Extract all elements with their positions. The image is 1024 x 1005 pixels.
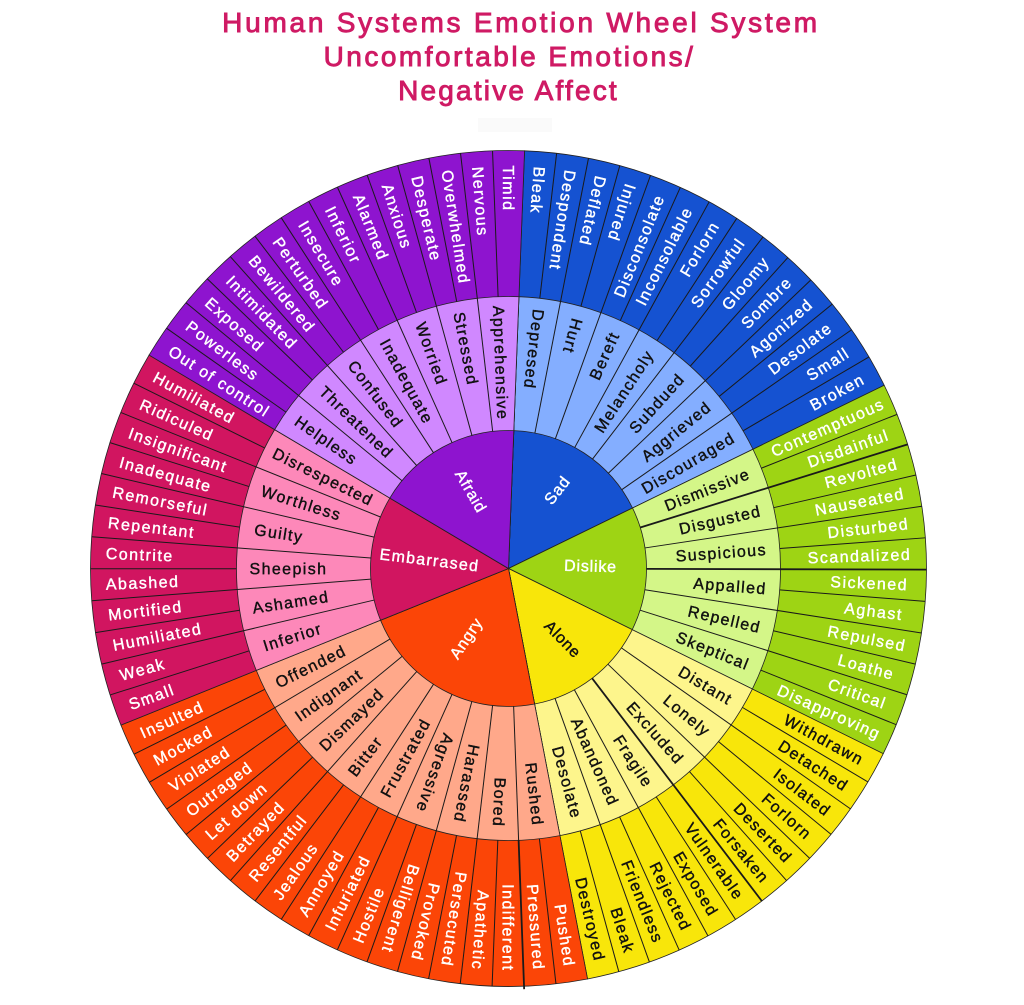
outer labels: Alone bbox=[571, 712, 866, 963]
outer labels: Embarrassed: Ridiculed bbox=[137, 397, 216, 445]
outer labels: Afraid: Intimidated bbox=[222, 273, 300, 353]
middle labels: Afraid: Worried bbox=[411, 320, 449, 388]
outer labels: Embarrassed: Humiliated bbox=[150, 370, 238, 428]
outer labels: Afraid: Nervous bbox=[468, 166, 490, 237]
outer labels: Alone: Destroyed bbox=[571, 876, 607, 963]
outer labels: Dislike: Nauseated bbox=[814, 486, 906, 520]
middle band: Dislike bbox=[508, 449, 781, 689]
outer labels: Alone: Detached bbox=[775, 738, 851, 795]
panel: Afraid bbox=[149, 151, 525, 568]
middle labels: Angry: Indignant bbox=[292, 666, 366, 725]
outer labels: Alone: Isolated bbox=[770, 766, 834, 820]
panel: Sad bbox=[508, 151, 884, 568]
core wedge: Afraid bbox=[390, 430, 514, 568]
core label: Afraid: Afraid bbox=[451, 467, 489, 516]
middle labels: Afraid: Apprehensive bbox=[489, 305, 510, 421]
middle labels: Angry: Bitter bbox=[346, 734, 387, 780]
outer labels: Angry: Mocked bbox=[151, 724, 216, 770]
middle labels: Embarrassed: Guilty bbox=[253, 522, 304, 546]
outer labels: Sad: Injured bbox=[604, 182, 638, 243]
outer labels: Embarrassed: Insignificant bbox=[126, 425, 230, 477]
middle labels: Alone bbox=[548, 664, 735, 821]
middle labels: Sad: Depresed bbox=[520, 308, 546, 390]
outer band: Afraid bbox=[149, 151, 525, 568]
core label: Sad: Sad bbox=[542, 473, 574, 508]
middle labels: Sad: Discouraged bbox=[639, 430, 738, 498]
outer labels: Dislike: Contemptuous bbox=[769, 396, 887, 461]
outer labels: Embarrassed: Weak bbox=[118, 656, 167, 685]
outer labels: Dislike: Disdainful bbox=[806, 427, 892, 472]
outer labels: Dislike: Disturbed bbox=[827, 516, 910, 542]
outer labels: Alone: Withdrawn bbox=[781, 712, 866, 769]
outer labels: Embarrassed bbox=[105, 370, 238, 714]
outer labels: Afraid: Perturbed bbox=[269, 235, 331, 313]
outer labels: Embarrassed: Humiliated bbox=[111, 621, 204, 655]
middle labels: Afraid: Threatened bbox=[315, 384, 396, 462]
outer labels: Afraid: Alarmed bbox=[349, 192, 391, 263]
middle labels: Embarrassed: Inferior bbox=[261, 621, 325, 655]
middle labels: Afraid: Inadequate bbox=[376, 337, 436, 427]
outer labels: Angry: Provoked bbox=[407, 881, 442, 963]
outer labels: Afraid: Desperate bbox=[407, 174, 444, 263]
outer labels: Dislike: Repulsed bbox=[826, 624, 907, 655]
outer labels: Embarrassed: Repentant bbox=[107, 515, 196, 542]
outer labels: Afraid bbox=[165, 166, 516, 421]
outer labels: Sad: Deflated bbox=[575, 174, 608, 248]
outer labels: Afraid: Insecure bbox=[294, 218, 346, 290]
core label: Embarrassed: Embarrased bbox=[379, 546, 480, 576]
middle labels: Dislike: Suspicious bbox=[675, 542, 767, 566]
middle band: Alone bbox=[508, 568, 752, 836]
middle labels: Alone: Excluded bbox=[622, 699, 686, 768]
outer labels: Alone: Friendless bbox=[617, 858, 666, 946]
outer labels: Afraid: Overwhelmed bbox=[438, 169, 472, 286]
core label: Angry: Angry bbox=[447, 615, 487, 663]
outer labels: Dislike: Sickened bbox=[830, 574, 908, 594]
core wedge: Sad bbox=[508, 431, 633, 568]
middle labels: Embarrassed: Ashamed bbox=[251, 589, 331, 618]
outer labels: Afraid: Out of control bbox=[165, 343, 272, 421]
outer labels: Dislike: Revolted bbox=[823, 456, 900, 492]
middle labels: Embarrassed: Disrespected bbox=[269, 446, 376, 510]
middle labels: Angry: Offended bbox=[273, 643, 349, 692]
middle labels: Angry: Rushed bbox=[521, 762, 545, 827]
outer labels: Angry bbox=[138, 699, 577, 972]
middle band: Afraid bbox=[275, 296, 519, 568]
title: Human Systems Emotion Wheel System bbox=[222, 7, 820, 38]
core wedge: Angry bbox=[381, 568, 535, 707]
outer labels: Embarrassed: Small bbox=[127, 682, 177, 714]
middle labels: Sad bbox=[520, 308, 738, 498]
outer labels: Angry: Outraged bbox=[184, 759, 256, 820]
middle labels: Dislike: Repelled bbox=[686, 603, 762, 637]
outer band: Alone bbox=[508, 568, 883, 979]
outer labels: Afraid: Powerless bbox=[182, 318, 262, 385]
outer labels: Alone: Bleak bbox=[606, 906, 637, 956]
middle labels: Afraid: Confused bbox=[344, 358, 406, 432]
outer band: Sad bbox=[508, 151, 884, 568]
outer labels: Alone: Deserted bbox=[730, 800, 795, 867]
middle labels: Dislike: Appalled bbox=[693, 576, 767, 598]
middle band: Embarrassed bbox=[237, 430, 508, 670]
middle labels: Angry: Agressive bbox=[412, 731, 456, 815]
middle labels: Alone: Distant bbox=[675, 664, 735, 709]
outer labels: Angry: Pushed bbox=[551, 903, 577, 968]
middle labels: Sad: Melancholy bbox=[592, 347, 658, 436]
outer labels: Angry: Belligerent bbox=[378, 862, 422, 955]
outer labels: Embarrassed: Inadequate bbox=[117, 455, 214, 496]
outer labels: Embarrassed: Contrite bbox=[105, 546, 174, 565]
core wedge: Dislike bbox=[508, 508, 647, 630]
middle labels: Angry: Harassed bbox=[450, 743, 482, 824]
middle labels: Angry bbox=[273, 643, 545, 828]
outer labels: Dislike: Aghast bbox=[843, 600, 904, 624]
outer labels: Alone: Vulnerable bbox=[681, 820, 746, 904]
outer labels: Angry: Hostile bbox=[351, 884, 389, 946]
middle labels: Dislike: Skeptical bbox=[673, 629, 752, 674]
outer labels: Sad: Broken bbox=[807, 371, 868, 415]
outer labels: Afraid: Bewildered bbox=[245, 253, 318, 336]
middle labels: Sad: Hurt bbox=[559, 316, 585, 355]
outer labels: Dislike: Loathe bbox=[836, 652, 896, 684]
panel: Embarrassed bbox=[90, 355, 508, 725]
outer labels: Afraid: Anxious bbox=[378, 182, 414, 251]
middle labels: Alone: Fragile bbox=[609, 733, 655, 791]
core wedge: Embarrassed bbox=[371, 498, 508, 620]
core label: Dislike: Dislike bbox=[564, 558, 617, 576]
outer labels: Alone: Rejected bbox=[646, 860, 694, 934]
outer labels: Angry: Resentful bbox=[246, 812, 311, 885]
core wedge: Alone bbox=[508, 568, 632, 704]
outer labels: Afraid: Inferior bbox=[321, 204, 364, 267]
outer labels: Angry: Infuriated bbox=[323, 853, 374, 934]
middle labels: Angry: Frustrated bbox=[378, 716, 435, 801]
middle labels: Sad: Bereft bbox=[587, 329, 624, 383]
outer labels: Angry: Annoyed bbox=[296, 848, 348, 920]
outer labels: Sad bbox=[526, 166, 868, 415]
middle labels: Sad: Subdued bbox=[627, 371, 689, 437]
outer labels: Angry: Insulted bbox=[138, 699, 207, 742]
middle labels: Embarrassed: Sheepish bbox=[249, 561, 327, 578]
outer band: Angry bbox=[121, 568, 588, 987]
emotion wheel bbox=[90, 151, 926, 989]
outer labels: Angry: Betrayed bbox=[224, 799, 289, 866]
outer band: Dislike bbox=[508, 385, 926, 754]
outer labels: Sad: Sombre bbox=[738, 274, 796, 333]
outer labels: Sad: Bleak bbox=[526, 166, 547, 215]
outer labels: Embarrassed: Abashed bbox=[106, 574, 180, 594]
middle labels: Alone: Abandoned bbox=[567, 716, 621, 809]
outer labels: Sad: Forlorn bbox=[678, 219, 724, 280]
middle labels: Dislike bbox=[662, 466, 767, 674]
middle labels: Dislike: Dismissive bbox=[662, 466, 753, 515]
middle labels: Alone: Lonely bbox=[659, 692, 713, 741]
middle labels: Embarrassed: Worthless bbox=[259, 483, 343, 525]
outer labels: Angry: Jealous bbox=[270, 840, 322, 904]
outer labels: Sad: Inconsolable bbox=[633, 204, 697, 309]
outer labels: Alone: Exposed bbox=[669, 849, 721, 920]
outer labels: Sad: Agonized bbox=[747, 296, 817, 361]
outer labels: Angry: Violated bbox=[166, 744, 234, 796]
outer labels: Angry: Apathetic bbox=[468, 890, 491, 971]
middle band: Sad bbox=[508, 297, 753, 568]
outer labels: Embarrassed: Mortified bbox=[107, 599, 184, 624]
outer labels: Sad: Desolate bbox=[766, 320, 836, 379]
middle labels: Alone: Desolate bbox=[548, 745, 584, 821]
outer labels: Embarrassed: Remorseful bbox=[111, 485, 209, 520]
outer labels: Dislike: Disapproving bbox=[774, 682, 883, 743]
outer labels: Alone: Forlorn bbox=[758, 791, 814, 844]
middle labels: Dislike: Disgusted bbox=[678, 503, 763, 539]
core label: Alone: Alone bbox=[540, 618, 584, 662]
middle labels: Afraid: Stressed bbox=[449, 311, 480, 387]
middle labels: Sad: Aggrieved bbox=[639, 399, 715, 466]
outer labels: Dislike bbox=[769, 396, 912, 743]
outer labels: Sad: Sorrowful bbox=[688, 235, 749, 311]
outer labels: Angry: Let down bbox=[203, 780, 271, 844]
outer labels: Angry: Pressured bbox=[523, 884, 546, 971]
outer labels: Angry: Indifferent bbox=[499, 884, 516, 972]
outer labels: Sad: Disconsolate bbox=[612, 192, 669, 300]
title bbox=[222, 7, 820, 106]
outer band: Embarrassed bbox=[90, 355, 508, 725]
middle labels: Angry: Dismayed bbox=[317, 686, 388, 755]
middle labels: Embarrassed bbox=[249, 446, 376, 655]
outer labels: Dislike: Critical bbox=[825, 676, 888, 713]
title: Negative Affect bbox=[398, 75, 619, 106]
middle labels: Afraid: Helpless bbox=[291, 413, 360, 469]
outer labels: Sad: Despondent bbox=[545, 169, 578, 272]
middle band: Angry bbox=[256, 568, 560, 840]
panel: Alone bbox=[508, 568, 883, 979]
panel: Dislike bbox=[508, 385, 926, 754]
outer labels: Afraid: Exposed bbox=[201, 295, 267, 356]
outer labels: Alone: Forsaken bbox=[709, 816, 772, 887]
outer labels: Sad: Small bbox=[804, 345, 853, 385]
middle labels: Angry: Bored bbox=[489, 777, 508, 828]
panel: Angry bbox=[121, 568, 588, 989]
middle labels: Afraid bbox=[291, 305, 510, 469]
outer labels: Dislike: Scandalized bbox=[807, 547, 912, 567]
outer labels: Afraid: Timid bbox=[499, 166, 516, 212]
outer labels: Angry: Persecuted bbox=[437, 870, 469, 968]
outer labels: Sad: Gloomy bbox=[719, 254, 773, 314]
title: Uncomfortable Emotions/ bbox=[324, 41, 695, 72]
